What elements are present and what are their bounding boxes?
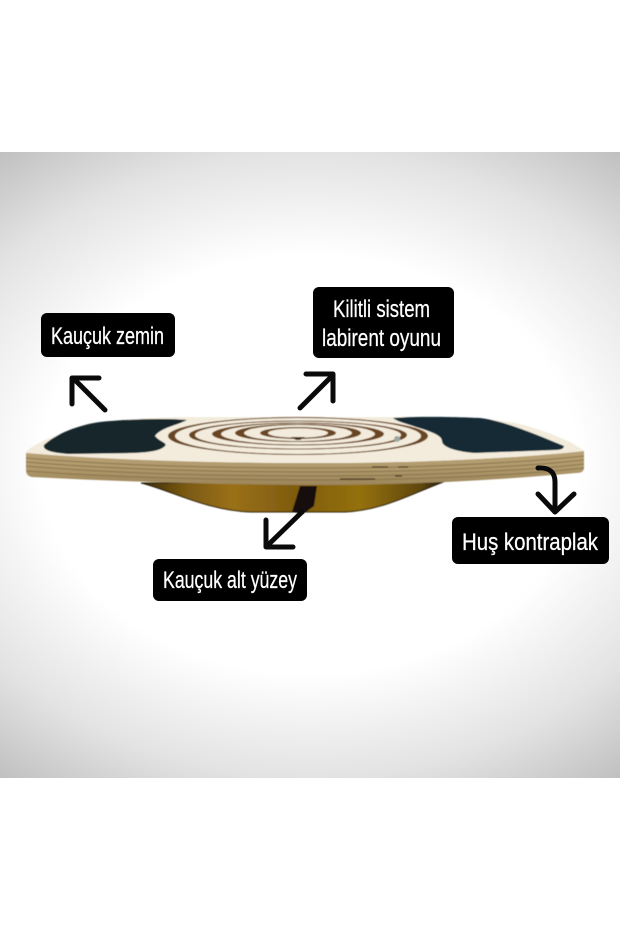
arrow: rubber underside — [266, 512, 302, 547]
right rubber pad — [393, 417, 564, 453]
arrow: rubber surface — [72, 378, 105, 410]
rubber bottom strip — [292, 486, 317, 514]
plywood side edge — [26, 451, 584, 485]
label: Kilitli sistem labirent oyunu: Kilitli sistem — [333, 296, 430, 323]
label: Kauçuk alt yüzey — [153, 559, 307, 601]
product: balance board — [26, 417, 584, 514]
arrow: birch plywood — [538, 468, 574, 512]
label: Kauçuk alt yüzey: Kauçuk alt yüzey — [163, 567, 297, 594]
label: Huş kontraplak: Huş kontraplak — [462, 529, 599, 556]
board top surface — [26, 417, 584, 463]
plywood layers — [26, 456, 584, 480]
background panel — [0, 152, 620, 778]
label: Huş kontraplak — [452, 517, 609, 564]
arrow: locking labyrinth — [300, 374, 333, 408]
left rubber pad — [44, 419, 187, 454]
maze rings — [168, 417, 428, 455]
label: Kilitli sistem labirent oyunu — [313, 287, 454, 358]
plywood knots — [340, 467, 408, 479]
board dome underside — [141, 481, 446, 512]
label: Kilitli sistem labirent oyunu: labirent oyunu — [322, 325, 441, 352]
label: Kauçuk zemin: Kauçuk zemin — [51, 323, 164, 350]
label: Kauçuk zemin — [41, 313, 175, 357]
